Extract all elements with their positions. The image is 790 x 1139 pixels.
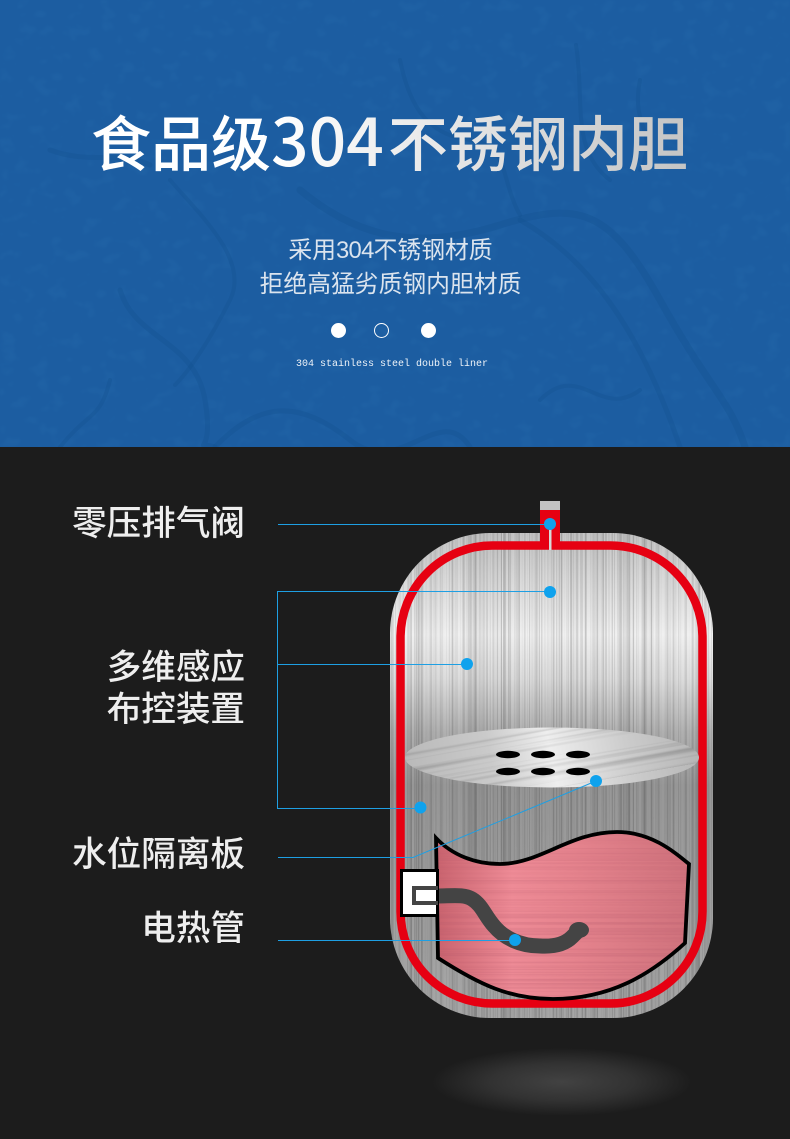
title: 不锈钢内胆	[388, 97, 688, 184]
pagination dots	[331, 323, 436, 338]
leader lines	[278, 524, 596, 940]
title: 304	[271, 90, 384, 186]
label: multi-dimensional sensor	[107, 639, 245, 731]
tank floor shadow	[432, 1048, 692, 1116]
panel: blue water header	[0, 0, 790, 447]
callout dots	[414, 518, 602, 946]
subtitle line 1: 采用304不锈钢材质	[288, 237, 493, 264]
water separator plate	[405, 728, 699, 788]
label: multi-dimensional sensor: 布控装置	[107, 681, 245, 731]
heating element tube	[437, 896, 589, 946]
pink water body	[436, 830, 691, 1002]
english caption: 304 stainless steel double liner	[296, 359, 488, 370]
label: heating tube: 电热管	[141, 900, 245, 950]
heater connector box	[402, 870, 438, 916]
red inner liner	[400, 510, 702, 1004]
plate holes	[496, 751, 590, 775]
neck cap	[540, 501, 560, 535]
panel: water heater tank diagram	[277, 501, 713, 1110]
subtitle line 2: 拒绝高猛劣质钢内胆材质	[260, 271, 521, 298]
title: 食品级	[91, 97, 271, 184]
steel tank shell	[390, 501, 713, 1018]
title	[91, 90, 688, 186]
label: water level separator: 水位隔离板	[72, 826, 245, 876]
label: multi-dimensional sensor: 多维感应	[107, 639, 245, 689]
water splash background	[188, 216, 526, 447]
label: zero pressure vent valve: 零压排气阀	[72, 495, 245, 545]
